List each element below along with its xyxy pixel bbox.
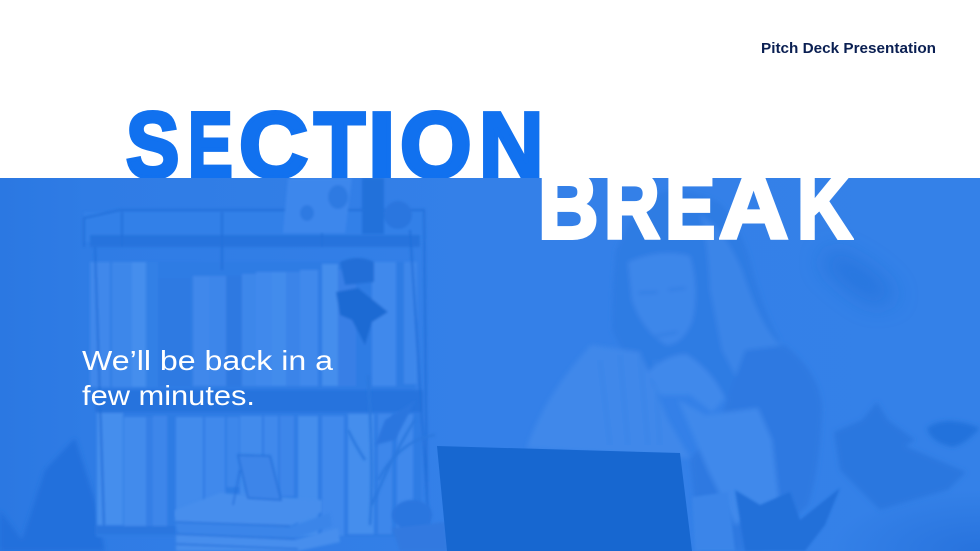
- panel: white top band: [0, 0, 980, 178]
- sweater right side: [698, 347, 782, 528]
- laptop: [437, 446, 692, 551]
- hand: [648, 354, 725, 412]
- blurred shadow on wall: [831, 259, 885, 295]
- face: [628, 253, 696, 345]
- background leaves at right: [834, 402, 980, 510]
- picture on shelf: [283, 178, 352, 233]
- label: deck title: Pitch Deck Presentation: [761, 41, 936, 57]
- panel: blue tinted photo: [0, 178, 980, 551]
- sweater left: [527, 345, 690, 458]
- plant and pens right of laptop: [692, 488, 840, 551]
- desk plant: [348, 414, 414, 525]
- shade at lower right: [916, 524, 980, 551]
- dark plant at lower left: [0, 438, 105, 551]
- lower books: [97, 413, 123, 525]
- subtitle text: few minutes.: [82, 380, 255, 411]
- hanging plant: [340, 258, 374, 285]
- small photo frame: [238, 455, 281, 500]
- heading: SECTION: [126, 100, 543, 178]
- subtitle text: We’ll be back in a: [82, 345, 333, 376]
- forearm: [678, 400, 779, 525]
- bookshelf: [84, 178, 430, 545]
- upper books: [90, 262, 110, 387]
- heading: BREAK: [538, 178, 854, 245]
- woman at laptop: [530, 256, 777, 522]
- hair: [650, 365, 651, 366]
- shelf boards and frame: [90, 235, 420, 247]
- stacked books on desk: [174, 413, 430, 551]
